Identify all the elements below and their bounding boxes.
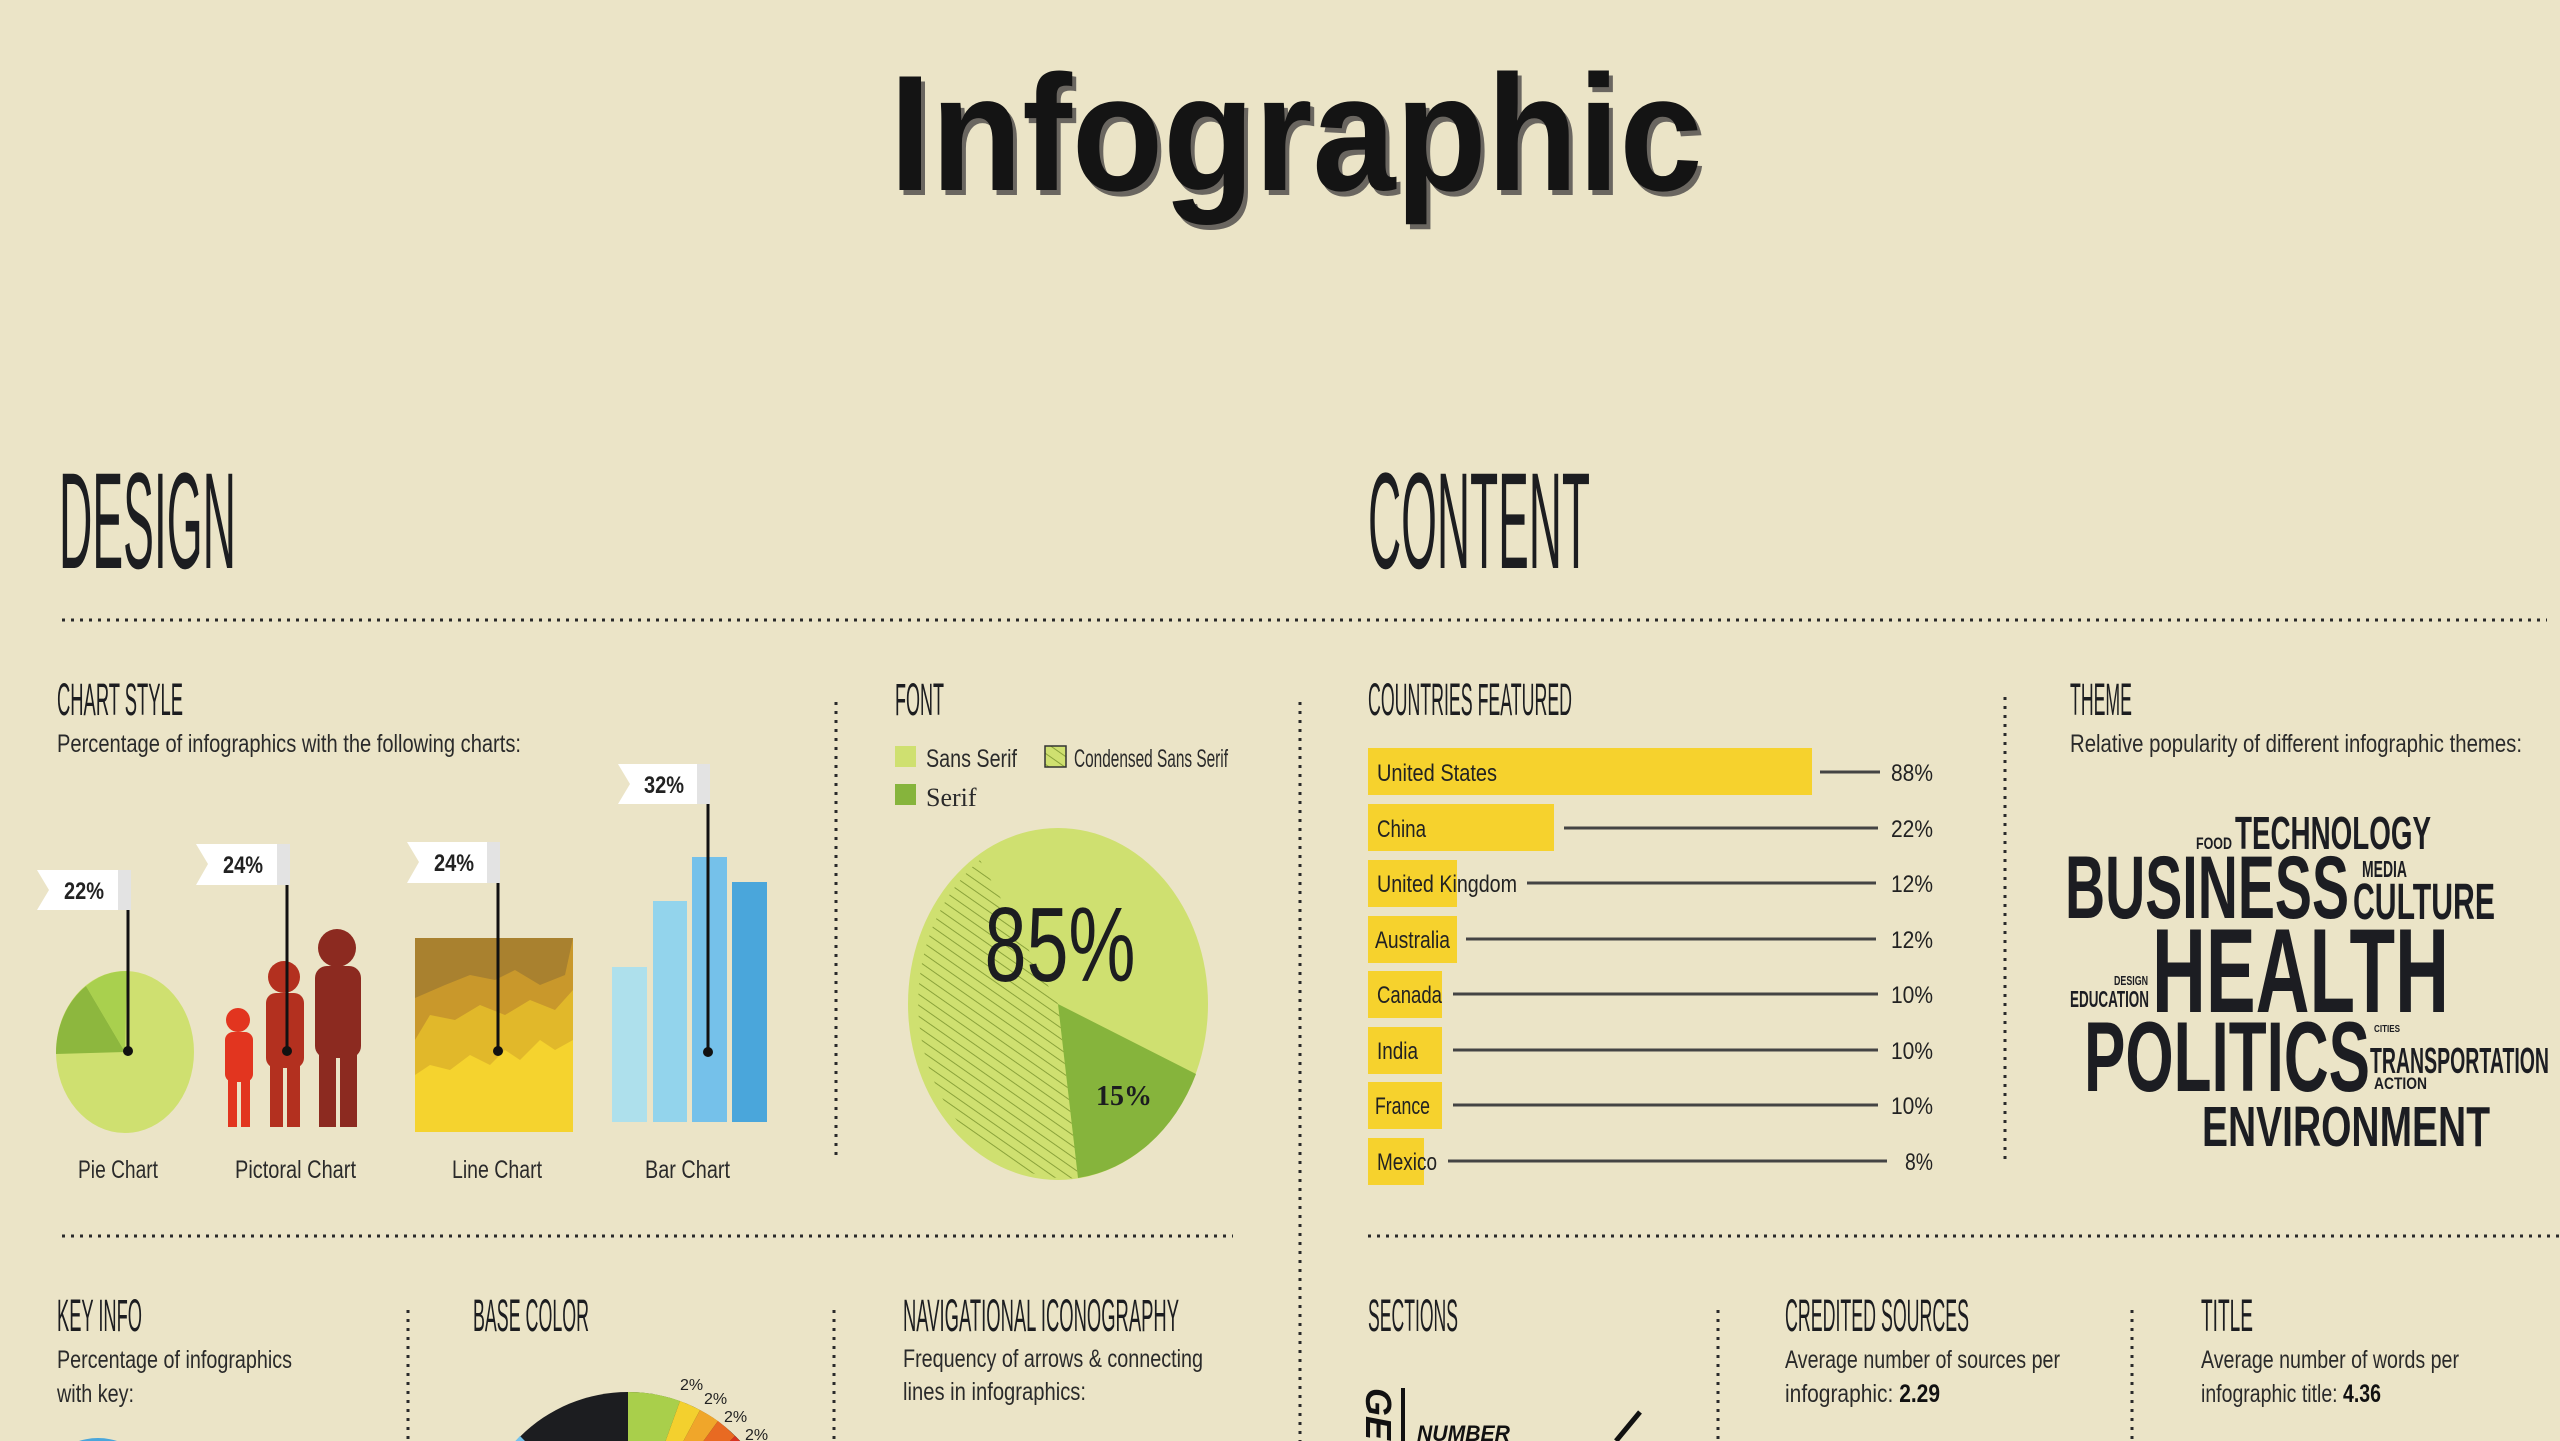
pie: font: 15% [1096,1081,1152,1112]
chart labels: Pictoral Chart [235,1156,356,1184]
subtitle: chart style: Percentage of infographics with the following charts: [57,730,521,758]
panel: key info: with key: [56,1380,134,1408]
chart labels: Line Chart [452,1156,542,1184]
text: credited sources: Average number of sources per [1785,1346,2060,1374]
text: navigational: Frequency of arrows & connecting [903,1345,1203,1373]
panel: font [895,674,1228,1180]
bar chart: countries: China [1377,816,1427,843]
panel: sections: SECTIONS [1368,1290,1458,1341]
text: title: Average number of words per [2201,1346,2459,1374]
word cloud: TECHNOLOGY [2235,807,2431,859]
bar chart: countries: 12% [1891,871,1933,898]
flag: 32% [618,764,710,804]
word cloud [2065,807,2549,1159]
text: DESIGN [59,445,236,598]
chart labels [78,1156,730,1184]
panel: key info [36,1290,292,1441]
bar chart: countries: United Kingdom [1377,871,1517,898]
panel: credited sources [1785,1290,2060,1408]
flag: 32%: 32% [644,772,684,799]
word cloud: POLITICS [2084,1001,2370,1112]
sections graphic [1358,1388,1640,1441]
text: CONTENT [1368,445,1590,598]
panel: chart style [37,674,767,1184]
bar chart: countries: Canada [1377,982,1442,1009]
chart labels: Bar Chart [645,1156,730,1184]
flag: 24% line [407,842,500,883]
flag: 24% pictoral [196,844,290,885]
pie: base color: 2% [680,1377,703,1394]
legend: Serif [926,783,977,812]
panel: base color: BASE COLOR [473,1290,589,1341]
pie: base color: 2% [724,1409,747,1426]
bar chart: countries [1368,748,1933,1185]
panel: countries featured [1368,674,1933,1185]
bar chart icon [612,857,767,1122]
panel: sections [1358,1290,1640,1441]
bar chart: countries: United States [1377,760,1497,787]
bar chart: countries: France [1375,1093,1430,1120]
title: Infographic [890,41,1702,225]
word cloud: EDUCATION [2070,986,2149,1012]
panel: title [2201,1290,2459,1408]
bar chart: countries: India [1377,1038,1419,1065]
bar chart: countries: 12% [1891,927,1933,954]
panel: theme [2065,674,2549,1159]
panel: countries featured: COUNTRIES FEATURED [1368,674,1572,725]
pie: base color [475,1377,781,1441]
panel: title: infographic title: 4.36 [2201,1380,2381,1408]
flag: 24% pictoral: 24% [223,852,263,879]
bar chart: countries: 10% [1891,982,1933,1009]
panel: navigational iconography [903,1290,1203,1406]
panel: navigational iconography: lines in infographics: [903,1378,1086,1406]
panel: credited sources: infographic: 2.29 [1785,1380,1940,1408]
bar chart: countries: Mexico [1377,1149,1437,1176]
word cloud: FOOD [2196,834,2232,853]
pie: font: 85% [984,886,1136,1004]
word cloud: MEDIA [2362,856,2407,882]
pie: font [908,828,1208,1180]
title: Infographic [894,46,1706,230]
icon: blue circle [36,1438,160,1441]
panel: title: TITLE [2201,1290,2253,1341]
legend: Condensed Sans Serif [1074,745,1228,773]
pie chart icon [56,971,194,1133]
bar chart: countries: 10% [1891,1038,1933,1065]
chart labels: Pie Chart [78,1156,158,1184]
word cloud: CITIES [2374,1024,2400,1035]
sections graphic: GE [1358,1388,1399,1441]
bar chart: countries: 10% [1891,1093,1933,1120]
panel: key info: KEY INFO [57,1290,142,1341]
bar chart: countries: 8% [1905,1149,1933,1176]
bar chart: countries: 88% [1891,760,1933,787]
panel: font: FONT [895,674,944,725]
pictoral chart icon [225,929,361,1127]
text: NAVIGATIONAL ICONOGRAPHY [903,1290,1179,1341]
flag: 24% line: 24% [434,850,474,877]
panel: base color [473,1290,781,1441]
flag: 22% [37,870,131,910]
panel: credited sources: CREDITED SOURCES [1785,1290,1969,1341]
line chart icon [415,938,573,1132]
legend: Sans Serif [926,745,1017,773]
bar chart: countries: Australia [1375,927,1451,954]
bar chart: countries: 22% [1891,816,1933,843]
flags with percentages [128,800,708,1052]
word cloud: DESIGN [2114,973,2148,988]
text: key info: Percentage of infographics [57,1346,292,1374]
legend [895,745,1228,812]
word cloud: ACTION [2374,1074,2427,1093]
flag: 22%: 22% [64,878,104,905]
pie: base color: 2% [704,1391,727,1408]
panel: theme: THEME [2070,674,2132,725]
panel: chart style: CHART STYLE [57,674,183,725]
word cloud: BUSINESS [2065,837,2349,937]
